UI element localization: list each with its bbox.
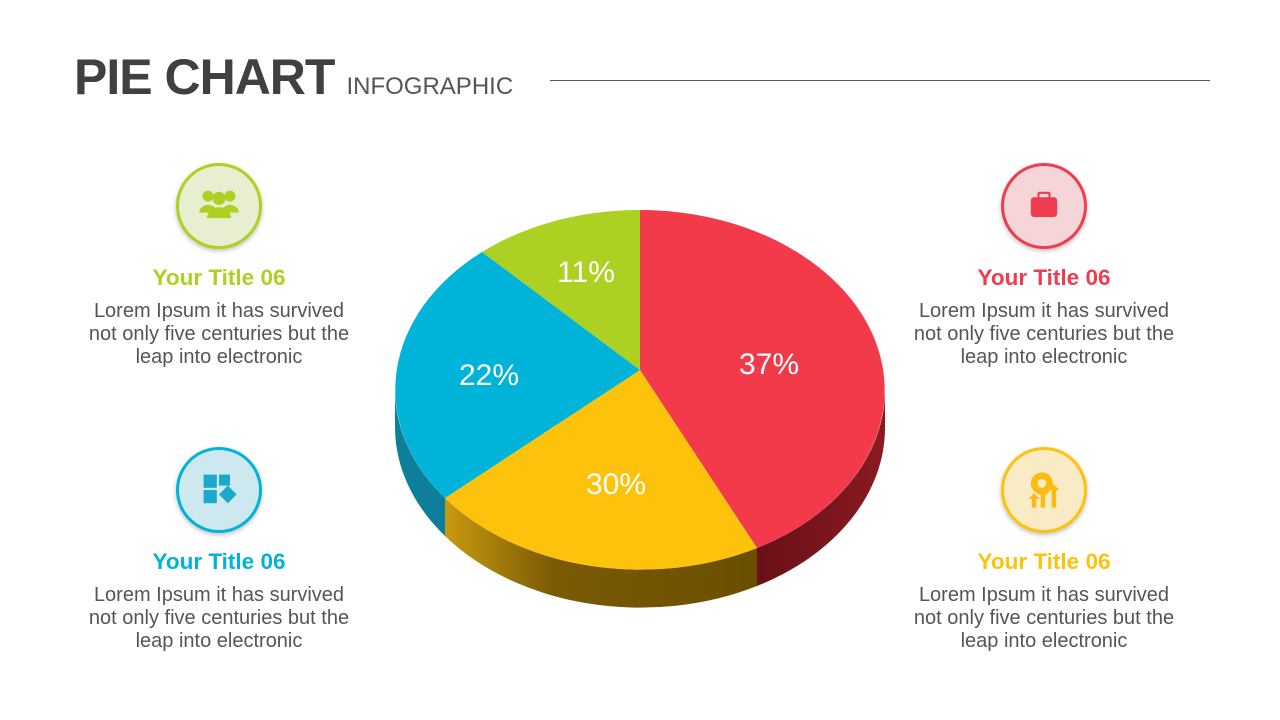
text: leap into electronic — [136, 346, 302, 368]
pie chart: 22% — [459, 359, 519, 392]
text: Your Title 06 — [978, 549, 1110, 574]
panel: red — [914, 162, 1174, 368]
text: not only five centuries but the — [89, 607, 349, 629]
text: not only five centuries but the — [914, 323, 1174, 345]
text: Lorem Ipsum it has survived — [94, 300, 344, 322]
icon: briefcase — [1001, 163, 1087, 249]
text: Your Title 06 — [153, 549, 285, 574]
text: not only five centuries but the — [914, 607, 1174, 629]
text: leap into electronic — [136, 630, 302, 652]
icon: people — [176, 163, 262, 249]
text: not only five centuries but the — [89, 323, 349, 345]
panel: yellow — [914, 446, 1174, 652]
text: Your Title 06 — [153, 265, 285, 290]
pie chart: 11% — [557, 256, 615, 289]
panel: green — [89, 162, 349, 368]
text: Your Title 06 — [978, 265, 1110, 290]
title: PIE CHART INFOGRAPHIC — [74, 49, 513, 105]
text: leap into electronic — [961, 346, 1127, 368]
icon: puzzle — [176, 447, 262, 533]
panel: blue — [89, 446, 349, 652]
text: Lorem Ipsum it has survived — [94, 584, 344, 606]
text: Lorem Ipsum it has survived — [919, 300, 1169, 322]
text: leap into electronic — [961, 630, 1127, 652]
pie chart: 37% — [739, 348, 799, 381]
icon: gear arrows — [1001, 447, 1087, 533]
text: Lorem Ipsum it has survived — [919, 584, 1169, 606]
pie chart: 30% — [586, 468, 646, 501]
